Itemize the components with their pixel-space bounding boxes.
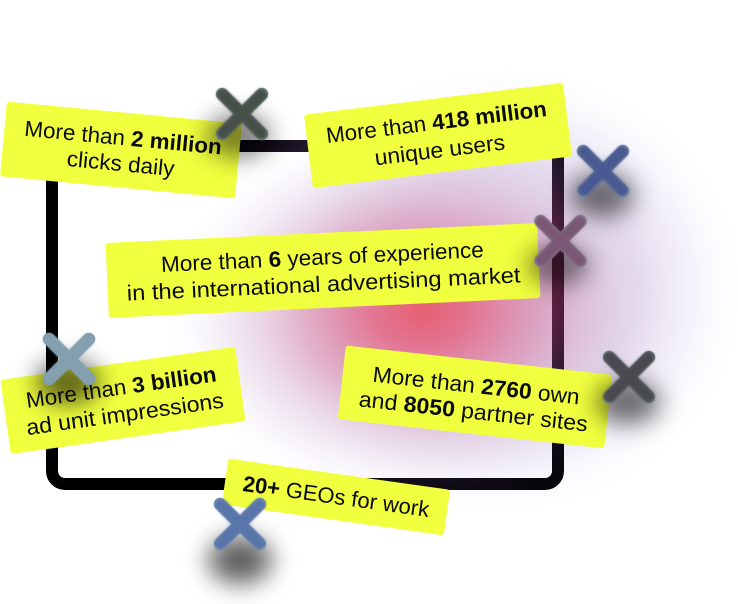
note: 2 million clicks: clicks daily: [66, 146, 176, 181]
frame: [52, 146, 558, 484]
note: 418 million users: More than 418 million: [325, 96, 548, 148]
note: 3 billion impressions: ad unit impressions: [25, 388, 225, 440]
note: 2 million clicks: More than 2 million: [23, 116, 223, 159]
note: 20+ GEOs: [222, 459, 450, 535]
note: 6 years of experience: in the international advertising market: [126, 262, 521, 306]
note: 6 years of experience: [105, 223, 541, 318]
note: 3 billion impressions: [0, 347, 246, 454]
note: 418 million users: unique users: [373, 130, 506, 170]
icon: cross top right: [583, 151, 623, 191]
icon: cross top left: [222, 94, 262, 134]
note: 6 years of experience: More than 6 years of experience: [160, 237, 484, 277]
icon: cross lower right: [609, 357, 649, 397]
cross shadows: [36, 114, 660, 584]
icon: cross left: [49, 339, 89, 379]
note: 418 million users: [304, 83, 572, 188]
note: 20+ GEOs: 20+ GEOs for work: [241, 471, 432, 522]
background glow: [167, 68, 738, 512]
icon: cross middle right: [540, 221, 580, 261]
note: 2760 own and 8050 partner sites: [338, 346, 612, 448]
note: 2 million clicks: [0, 102, 242, 198]
icon: cross bottom: [220, 504, 260, 544]
note: 2760 own and 8050 partner sites: and 8050 partner sites: [358, 386, 589, 436]
note: 2760 own and 8050 partner sites: More than 2760 own: [372, 362, 581, 409]
note: 3 billion impressions: More than 3 billion: [24, 361, 218, 413]
